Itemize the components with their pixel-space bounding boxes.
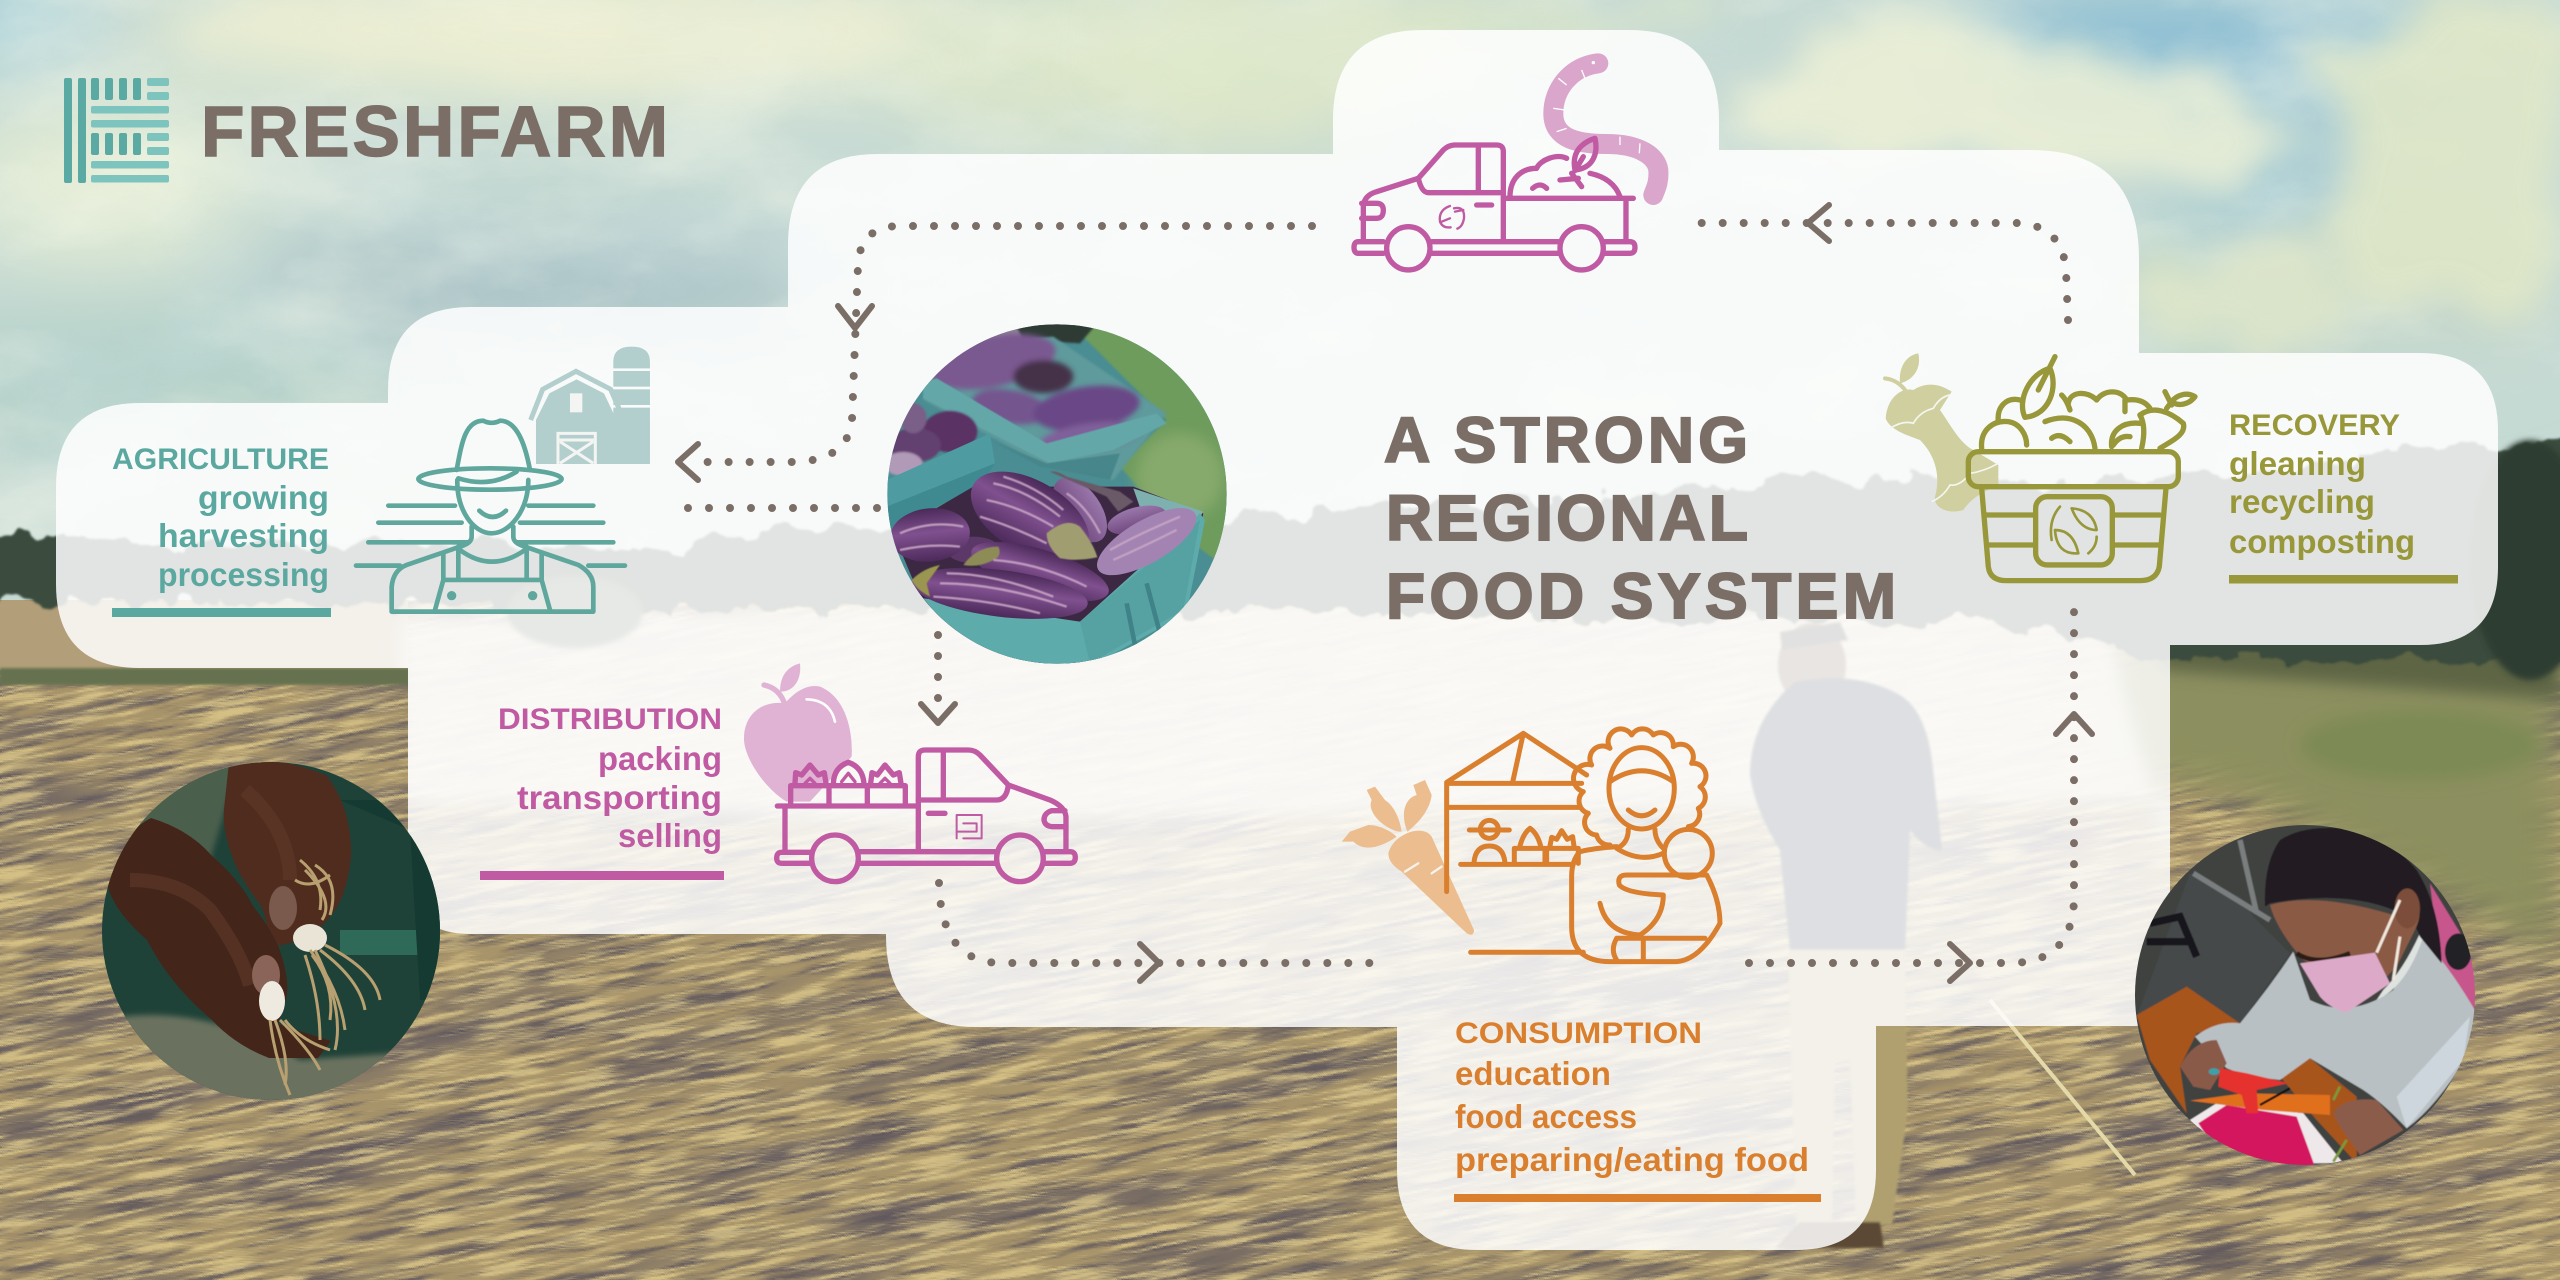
icon: truck with compost — [1354, 138, 1635, 270]
arrow: down from top truck — [838, 306, 872, 328]
face mask — [2300, 953, 2390, 1013]
distant tree line — [0, 440, 2560, 660]
text: consumption — [1454, 1017, 1821, 1202]
arrow: to agriculture — [678, 444, 698, 480]
table — [2137, 987, 2240, 1113]
icon: market stall and mother with baby — [1447, 729, 1720, 962]
left basket — [884, 403, 977, 476]
back basket — [923, 337, 1167, 480]
icon: basket of food scraps — [1968, 357, 2195, 581]
text: recovery: gleaning — [2229, 445, 2366, 482]
hands and carrot — [2180, 1040, 2227, 1090]
arrow: after consumption — [1950, 944, 1970, 981]
text: agriculture: AGRICULTURE — [112, 443, 329, 476]
text: distribution: selling — [618, 817, 722, 854]
icon: delivery truck with produce — [777, 750, 1075, 882]
title: REGIONAL — [1386, 482, 1748, 554]
pale road and field under panel — [404, 605, 2146, 816]
title — [1384, 404, 1896, 632]
text: distribution — [480, 703, 724, 880]
long straw — [1990, 1000, 2135, 1175]
photo: child peeling a carrot — [2130, 820, 2483, 1173]
icon: earthworm — [1553, 61, 1658, 195]
section: consumption — [1342, 729, 1821, 1202]
logo wordmark: FRESHFARM — [201, 93, 668, 172]
icon: farmer — [356, 421, 625, 612]
chair — [2430, 883, 2477, 1013]
arrow: to consumption — [1140, 944, 1159, 981]
section: recovery — [1885, 353, 2458, 584]
eggplants — [1042, 468, 1118, 552]
text: distribution: packing — [598, 740, 722, 777]
photo: eggplants in teal baskets — [880, 320, 1233, 673]
arrow: recovery to compost truck — [1808, 205, 1829, 241]
text: agriculture: processing — [158, 556, 329, 593]
photo: hands holding spring onions — [100, 760, 445, 1105]
grass on the right — [2100, 640, 2560, 960]
eggplant streaks — [900, 477, 1180, 613]
text: recovery: RECOVERY — [2229, 409, 2400, 442]
front basket — [893, 487, 1203, 667]
defined clouds — [180, 0, 2560, 345]
hair — [2265, 828, 2442, 963]
text: recovery: composting — [2229, 523, 2415, 560]
title: FOOD SYSTEM — [1386, 560, 1896, 632]
icon: barn and silo — [531, 347, 650, 464]
icon: carrot — [1342, 780, 1474, 935]
section: distribution — [480, 663, 1075, 882]
plate — [2190, 1103, 2343, 1163]
text: recovery — [2229, 409, 2458, 584]
face — [2270, 900, 2420, 977]
eggplant calyxes — [1047, 523, 1097, 560]
logo mark — [64, 78, 169, 183]
icon: apple — [744, 663, 852, 802]
text: consumption: preparing/eating food — [1455, 1141, 1809, 1178]
upper hand — [224, 760, 351, 945]
arrow: to distribution — [921, 704, 955, 723]
text: agriculture — [112, 443, 331, 617]
text: distribution: transporting — [517, 779, 722, 816]
section: agriculture — [112, 347, 650, 617]
text: agriculture: growing — [198, 479, 329, 516]
text: consumption: food access — [1455, 1098, 1637, 1135]
text: consumption: CONSUMPTION — [1455, 1017, 1702, 1050]
sweatshirt — [2195, 935, 2477, 1128]
straw field — [0, 600, 2560, 1280]
icon: apple core — [1885, 353, 1998, 511]
man standing in field — [1750, 622, 1942, 1248]
lower hand — [106, 818, 331, 1058]
dotted flow arrows — [678, 205, 2092, 981]
arrow: up to recovery — [2056, 714, 2092, 734]
text: recovery: recycling — [2229, 483, 2375, 520]
logo: Freshfarm — [64, 78, 668, 183]
section: compost truck — [1354, 61, 1658, 270]
text: distribution: DISTRIBUTION — [498, 703, 722, 736]
onions and roots — [293, 924, 327, 952]
text: agriculture: harvesting — [158, 517, 329, 554]
title: A STRONG — [1384, 404, 1748, 476]
text: consumption: education — [1455, 1055, 1611, 1092]
